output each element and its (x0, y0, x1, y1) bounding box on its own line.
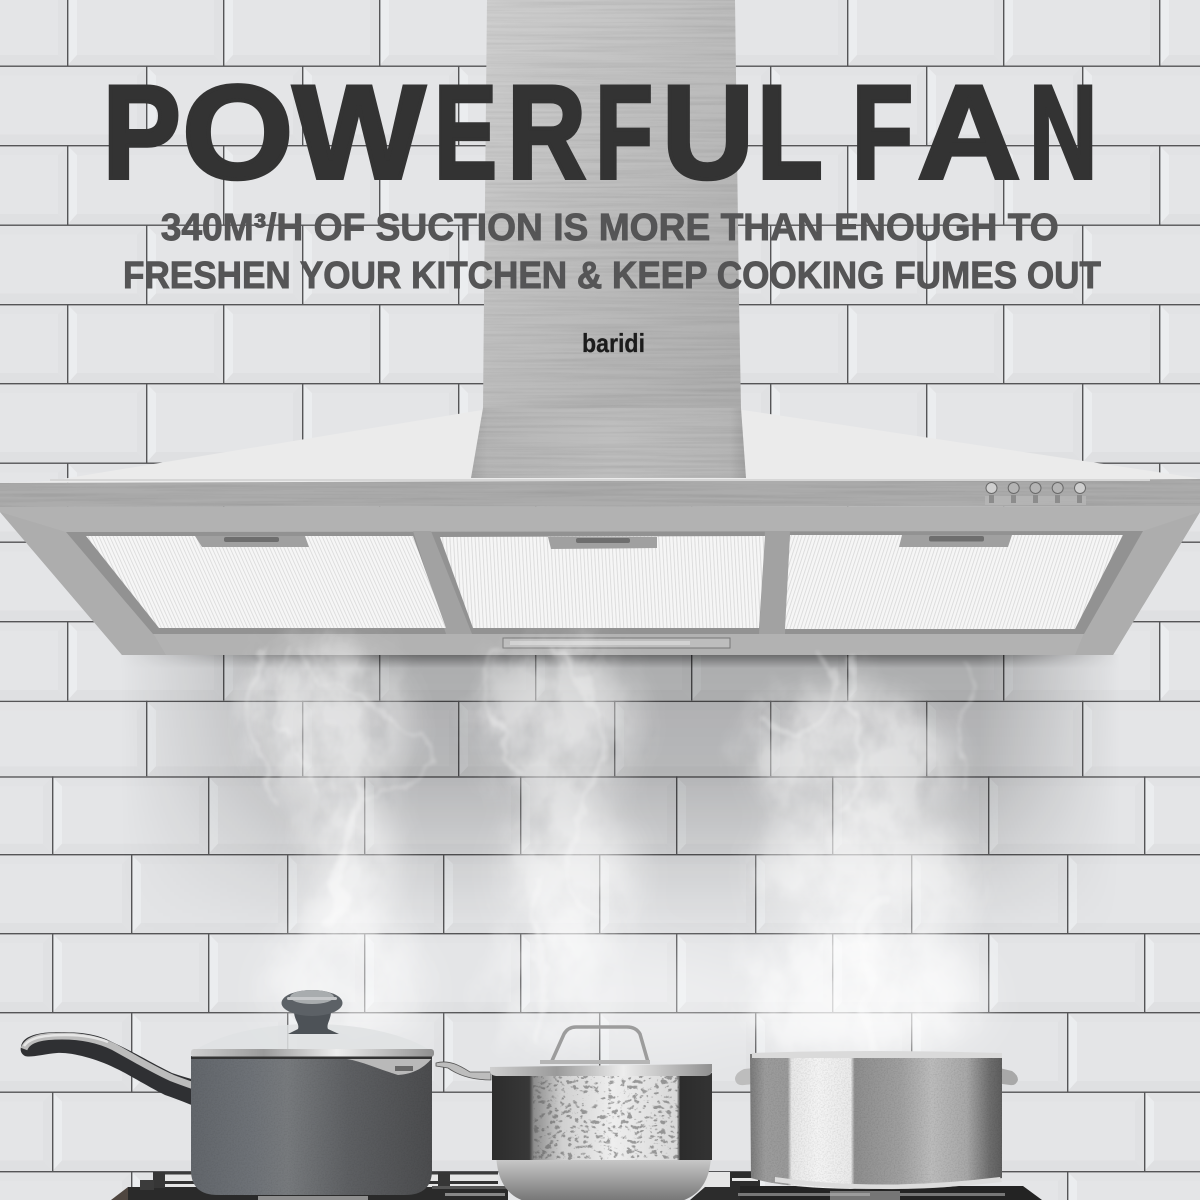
dividers (413, 531, 472, 634)
chimney neck (471, 408, 746, 478)
saucepan body (191, 1056, 432, 1195)
burner (830, 1191, 900, 1200)
filter right (785, 535, 1123, 629)
saucepan lid (191, 990, 434, 1059)
pot body (750, 1054, 1002, 1189)
pot side handle (436, 1062, 491, 1080)
title: N (1029, 59, 1097, 207)
subtitle line 2: FRESHEN YOUR KITCHEN & KEEP COOKING FUMES OUT (123, 255, 1101, 297)
logo: baridi (582, 328, 645, 358)
title: P (103, 59, 181, 207)
pot body (492, 1073, 712, 1160)
steam haze (265, 665, 985, 1055)
stock pot (735, 1051, 1018, 1189)
pot bowl (496, 1150, 711, 1200)
control buttons (985, 482, 1086, 505)
pot rim (490, 1064, 712, 1076)
stove grates (111, 1172, 1042, 1200)
range hood (0, 0, 1200, 655)
steam wisps (251, 650, 971, 1050)
saucepan (21, 990, 434, 1195)
grate right (690, 1172, 1042, 1200)
title: W (293, 59, 425, 207)
subtitle line 1: 340M³/H OF SUCTION IS MORE THAN ENOUGH TO (161, 207, 1059, 249)
saucepan handle (21, 1032, 246, 1117)
front band (0, 479, 1200, 507)
lid handle (551, 1027, 648, 1063)
title: E (434, 59, 497, 207)
pot rim (752, 1051, 1002, 1058)
frame opening (66, 531, 1143, 634)
lid knob (288, 1011, 339, 1034)
hood chimney (483, 0, 741, 408)
title: L (757, 59, 821, 207)
title: F (595, 59, 653, 207)
filter middle (440, 536, 765, 628)
hood canopy (0, 410, 1200, 483)
title: F (852, 59, 913, 207)
grate left (111, 1172, 522, 1200)
title: U (662, 59, 754, 207)
title: A (918, 59, 1020, 207)
hood shadow on wall (133, 655, 1111, 910)
title: O (182, 59, 293, 207)
center light (503, 638, 730, 648)
pot handles (735, 1067, 1018, 1085)
filter left (86, 536, 446, 628)
lower frame (0, 506, 1200, 655)
subtitle (123, 207, 1101, 297)
title: R (507, 59, 586, 207)
hammered pot (436, 1027, 712, 1200)
saucepan spout (340, 1058, 432, 1075)
steam clouds (250, 640, 980, 1055)
